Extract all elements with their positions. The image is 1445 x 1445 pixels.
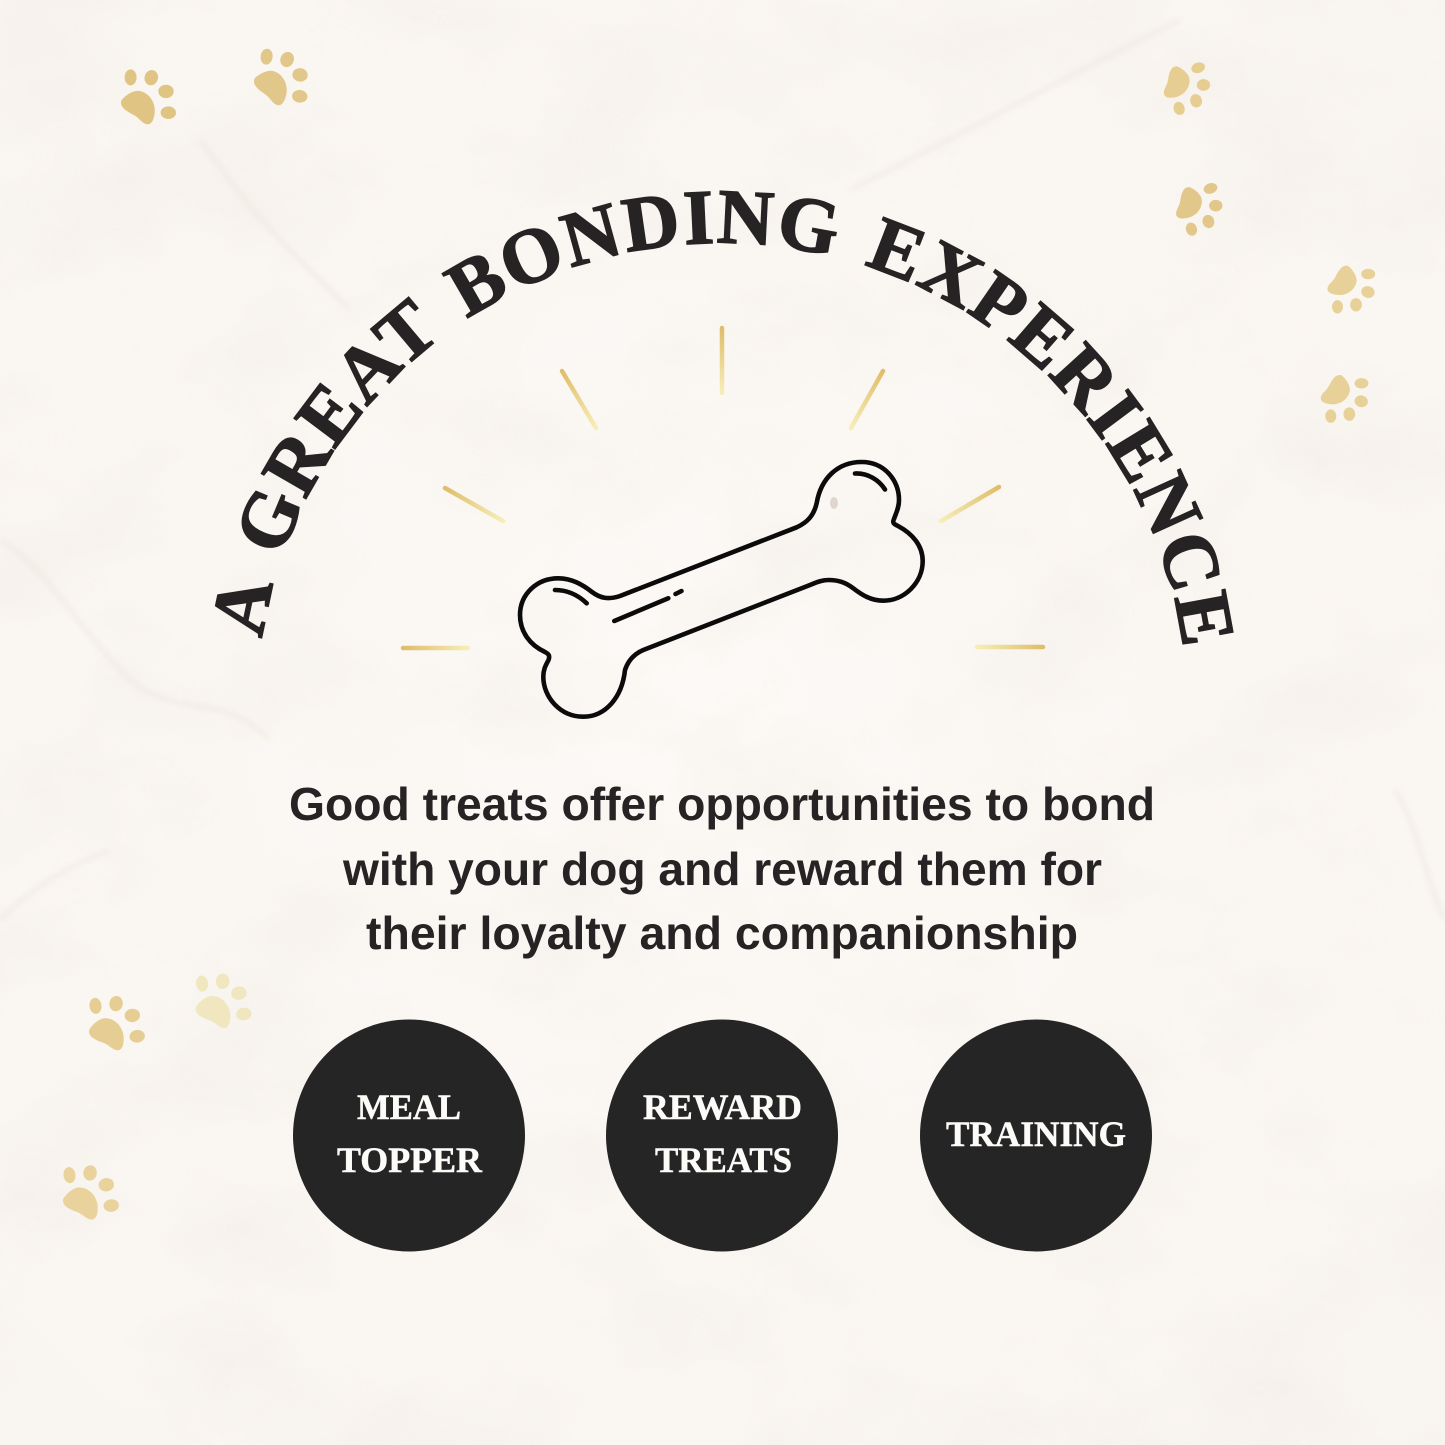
- text block: description: Good treats offer opportunities to bond: [289, 778, 1155, 830]
- text block: description: with your dog and reward them for: [342, 843, 1102, 895]
- badge: reward treats: TREATS: [655, 1140, 792, 1180]
- icon: golden sunburst rays: [403, 328, 1043, 648]
- badge: meal topper: TOPPER: [337, 1140, 483, 1180]
- paw print: top right 1: [1157, 57, 1218, 118]
- paw print: top right 2: [1169, 178, 1230, 239]
- badge: reward treats: [606, 1020, 838, 1252]
- bone blemish: [830, 497, 838, 509]
- paw print: lower left 2 faded: [191, 969, 253, 1031]
- paw print: lower left 3: [59, 1161, 120, 1223]
- paw print: right 2: [1321, 375, 1369, 423]
- badge: training: [920, 1020, 1152, 1252]
- title: curved heading: A GREAT BONDING EXPERIENCE: [214, 190, 1234, 645]
- text block: description: their loyalty and companionship: [366, 907, 1078, 959]
- text block: description: [289, 778, 1155, 959]
- badge: training: TRAINING: [946, 1114, 1126, 1154]
- paw print: right 1: [1327, 266, 1376, 313]
- paw print: top left 2: [251, 47, 313, 109]
- paw print: lower left 1: [85, 992, 146, 1054]
- paw print: top left 1: [121, 69, 176, 124]
- badge: reward treats: REWARD: [643, 1087, 802, 1127]
- icon: dog bone: [520, 462, 923, 717]
- badge: meal topper: [293, 1020, 525, 1252]
- badge: meal topper: MEAL: [357, 1087, 461, 1127]
